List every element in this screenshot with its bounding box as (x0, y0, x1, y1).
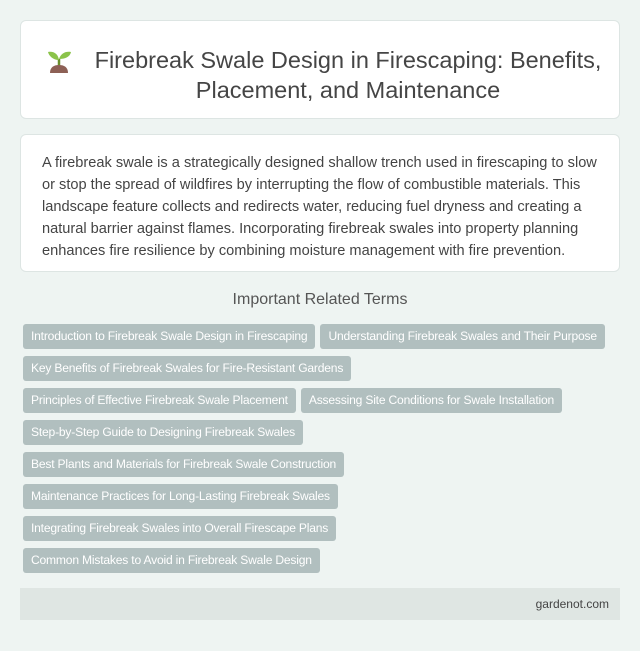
tags: Integrating Firebreak Swales into Overall Firescape Plans (31, 521, 328, 535)
description card (20, 134, 620, 272)
tags: Assessing Site Conditions for Swale Installation (309, 393, 554, 407)
tags: Best Plants and Materials for Firebreak Swale Construction (31, 457, 336, 471)
description text: A firebreak swale is a strategically designed shallow trench used in firescaping to slow or stop the spread of wildfires by interrupting the flow of combustible materials. This landscape feature collects and redirects water, reducing fuel dryness and creating a natural barrier against flames. Incorporating firebreak swales into property planning enhances fire resilience by combining moisture management with fire prevention. (42, 155, 597, 259)
tags: Step-by-Step Guide to Designing Firebreak Swales (31, 425, 295, 439)
title card (20, 20, 620, 119)
title: Firebreak Swale Design in Firescaping: Benefits, Placement, and Maintenance (95, 47, 601, 103)
footer text: gardenot.com (536, 597, 609, 611)
tags: Maintenance Practices for Long-Lasting Firebreak Swales (31, 489, 330, 503)
tags: Introduction to Firebreak Swale Design in Firescaping (31, 329, 307, 343)
tags: Key Benefits of Firebreak Swales for Fire-Resistant Gardens (31, 361, 343, 375)
icon: seedling (48, 52, 71, 73)
footer (20, 588, 620, 620)
heading: related terms: Important Related Terms (233, 291, 407, 308)
tags: Principles of Effective Firebreak Swale Placement (31, 393, 288, 407)
tags: Common Mistakes to Avoid in Firebreak Swale Design (31, 553, 312, 567)
tags: Understanding Firebreak Swales and Their Purpose (328, 329, 597, 343)
tags (23, 324, 605, 573)
